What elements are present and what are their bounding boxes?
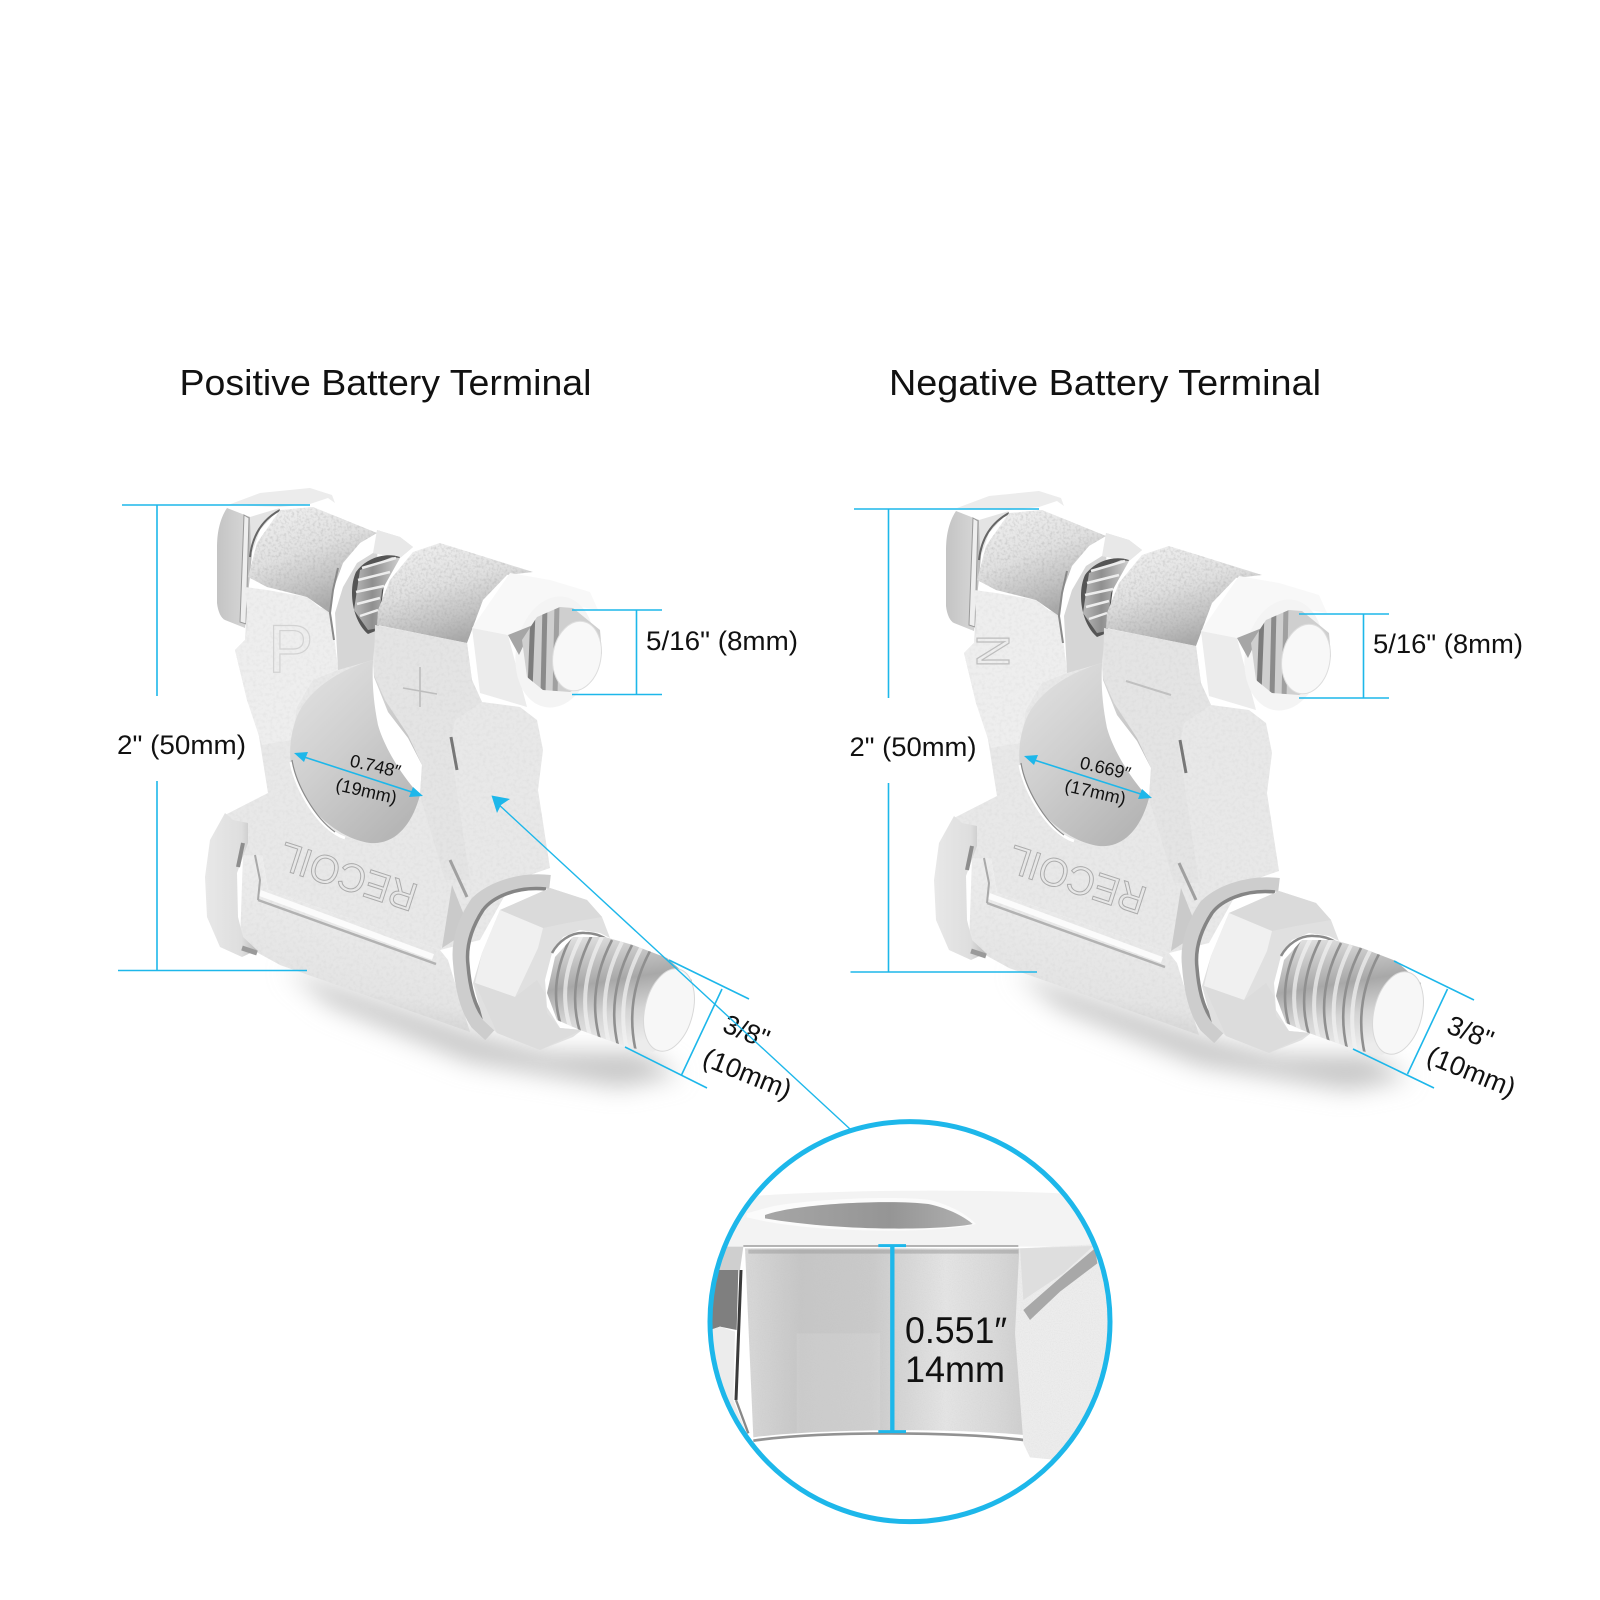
- dimension: small stud: [572, 610, 798, 694]
- dimension: small stud: 5/16" (8mm): [1373, 629, 1523, 659]
- dimension: post hole diameter: [294, 751, 423, 808]
- dimension: post hole diameter: 0.748″: [348, 751, 403, 782]
- embossed marks: RECOIL: [1003, 836, 1152, 922]
- embossed marks: P: [268, 611, 313, 687]
- dimension: large stud: [625, 960, 796, 1105]
- dimension: large stud: 3/8": [1443, 1010, 1498, 1055]
- photo: negative battery terminal: [934, 491, 1431, 1090]
- dimension text: [905, 1310, 1007, 1390]
- dimension bar: [878, 1246, 906, 1432]
- dimension: large stud: [1353, 961, 1520, 1103]
- dimension: large stud: (10mm): [699, 1042, 796, 1105]
- dimension text: 0.551″: [905, 1310, 1007, 1351]
- dimension: height 2in: 2" (50mm): [850, 732, 976, 762]
- photo: positive battery terminal: [205, 488, 702, 1087]
- panel: negative terminal: [850, 491, 1523, 1103]
- dimension: small stud: 5/16" (8mm): [646, 626, 798, 656]
- embossed marks: [967, 634, 1171, 922]
- dimension text: 14mm: [905, 1349, 1005, 1390]
- dimension: height 2in: [850, 509, 1039, 972]
- callout: detail circle: [710, 1122, 1113, 1522]
- dimension: large stud: 3/8": [719, 1009, 774, 1054]
- embossed marks: N: [967, 634, 1019, 668]
- dimension: post hole diameter: (19mm): [334, 774, 399, 808]
- embossed marks: RECOIL: [274, 833, 423, 919]
- dimension: post hole diameter: [1024, 753, 1152, 809]
- lens ring: [710, 1122, 1110, 1522]
- dimension: post hole diameter: (17mm): [1063, 775, 1128, 809]
- embossed marks: [268, 611, 437, 919]
- panel: positive terminal: [117, 488, 798, 1105]
- arrow: leader to detail circle: [492, 796, 850, 1129]
- dimension: large stud: (10mm): [1423, 1040, 1520, 1103]
- photo: magnified jaw: [710, 1191, 1113, 1460]
- title: positive terminal: Positive Battery Terminal: [180, 362, 592, 403]
- dimension: post hole diameter: 0.669″: [1078, 753, 1133, 784]
- dimension: height 2in: 2" (50mm): [117, 730, 246, 760]
- title: negative terminal: Negative Battery Terminal: [889, 362, 1321, 403]
- dimension: height 2in: [117, 505, 310, 970]
- dimension: small stud: [1299, 614, 1523, 698]
